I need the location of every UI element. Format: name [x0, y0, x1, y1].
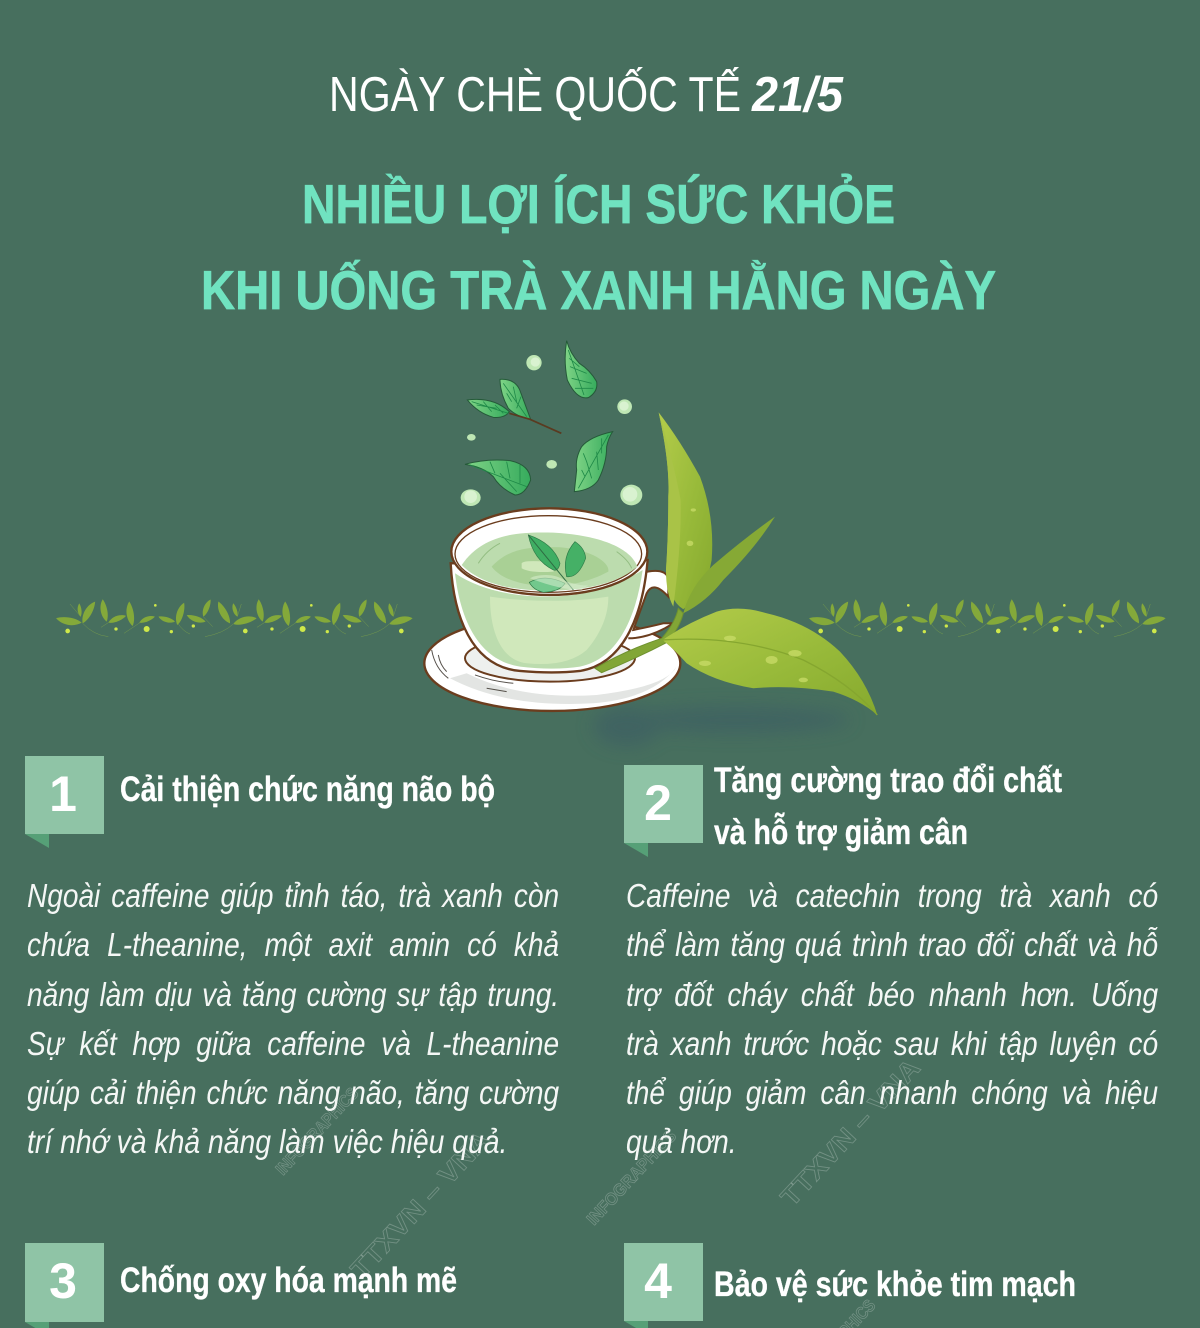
text block: benefit 1: năng làm dịu và tăng cường sự tập trung.	[27, 976, 559, 1013]
watermark: TTXVN – VNA	[344, 1124, 496, 1284]
text block: benefit 2: Caffeine và catechin trong trà xanh có	[626, 877, 1158, 914]
badge 4: 4	[644, 1253, 672, 1309]
icon: droplets	[461, 355, 642, 506]
panel heading 2: Tăng cường trao đổi chất	[714, 761, 1062, 800]
text block: benefit 2: thể giúp giảm cân nhanh chóng và hiệu	[626, 1074, 1158, 1111]
text block: benefit 1: trí nhớ và khả năng làm việc hiệu quả.	[27, 1123, 507, 1160]
panel heading 1: Cải thiện chức năng não bộ	[120, 770, 495, 809]
text block: benefit 1	[27, 877, 559, 1160]
watermark: TTXVN – VNA	[774, 1052, 926, 1212]
heading: many health benefits: KHI UỐNG TRÀ XANH HẰNG NGÀY	[201, 259, 996, 321]
panel heading 4	[624, 1243, 1076, 1328]
text block: benefit 2: quả hơn.	[626, 1123, 737, 1160]
icon: leaf in tea	[528, 535, 588, 592]
text block: benefit 1: chứa L-theanine, một axit amin có khả	[27, 926, 559, 963]
heading: many health benefits: NHIỀU LỢI ÍCH SỨC KHỎE	[302, 173, 895, 235]
watermark	[272, 1052, 926, 1328]
title: international tea day: NGÀY CHÈ QUỐC TẾ	[329, 67, 741, 122]
badge 3: 3	[49, 1253, 77, 1309]
text block: benefit 2: trợ đốt cháy chất béo nhanh hơn. Uống	[626, 976, 1158, 1013]
illustration: cup of green tea with leaves	[424, 341, 877, 747]
panel heading 3	[25, 1243, 457, 1328]
panel heading 1	[25, 756, 495, 848]
icon: handle	[628, 571, 673, 638]
watermark: INFOGRAPHICS	[272, 1084, 362, 1179]
icon: cup	[451, 508, 648, 672]
text block: benefit 1: giúp cải thiện chức năng não, tăng cường	[27, 1074, 559, 1111]
panel heading 3: Chống oxy hóa mạnh mẽ	[120, 1261, 457, 1300]
text block: benefit 2: thể làm tăng quá trình trao đổi chất và hỗ	[626, 926, 1158, 963]
panel heading 2	[624, 761, 1062, 857]
badge 3	[25, 1243, 104, 1328]
badge 1	[25, 756, 104, 848]
text block: benefit 2: trà xanh trước hoặc sau khi tập luyện có	[626, 1025, 1158, 1062]
icon: saucer	[424, 616, 680, 711]
watermark: INFOGRAPHICS	[583, 1127, 680, 1229]
heading: many health benefits	[201, 173, 996, 321]
badge 2	[624, 765, 703, 857]
panel heading 4: Bảo vệ sức khỏe tim mạch	[714, 1265, 1076, 1304]
panel heading 2: và hỗ trợ giảm cân	[714, 812, 968, 852]
badge 1: 1	[49, 766, 77, 822]
title: international tea day: 21/5	[751, 68, 844, 122]
shadow	[593, 707, 850, 747]
badge 2: 2	[644, 775, 672, 831]
text block: benefit 1: Sự kết hợp giữa caffeine và L-theanine	[27, 1025, 559, 1062]
text block: benefit 2	[626, 877, 1158, 1160]
icon: floating leaves	[465, 341, 613, 495]
text block: benefit 1: Ngoài caffeine giúp tỉnh táo, trà xanh còn	[27, 877, 559, 914]
decoration: left leaf border	[55, 598, 413, 637]
decoration: right leaf border	[808, 598, 1166, 637]
badge 4	[624, 1243, 703, 1328]
icon: fresh tea branch	[595, 412, 877, 715]
